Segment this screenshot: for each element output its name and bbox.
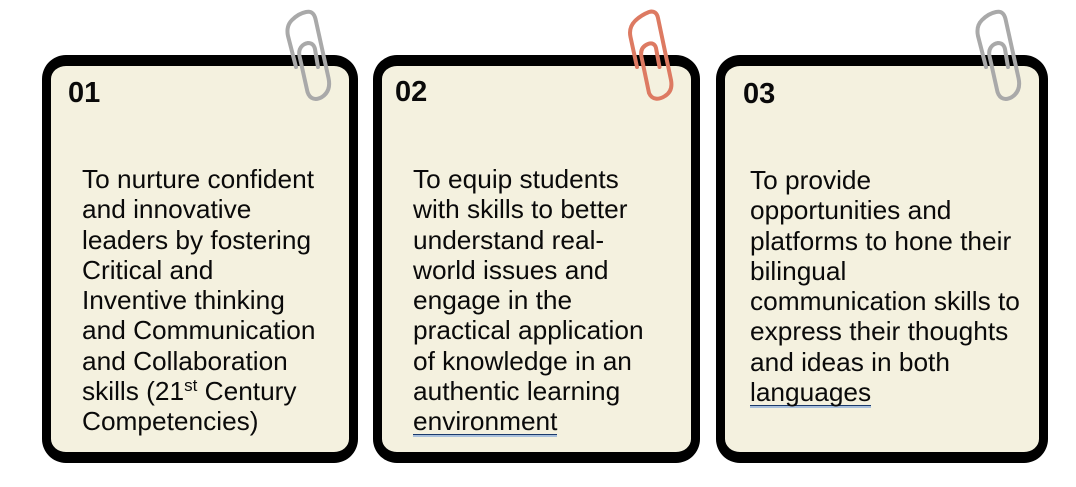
- text block: card 01: and Communication: [82, 315, 315, 345]
- text block: card 01: Competencies): [82, 406, 259, 436]
- text block: card 02: [413, 164, 644, 437]
- text block: card 01: [82, 164, 315, 436]
- text block: card 02: authentic learning: [413, 376, 620, 406]
- panel: card 02: [373, 55, 700, 463]
- text block: card 02: understand real-: [413, 224, 604, 254]
- text block: card 01: and Collaboration: [82, 346, 288, 376]
- text block: card 03: To provide: [750, 165, 871, 195]
- text block: card 01: and innovative: [82, 194, 251, 224]
- heading: 02: 02: [395, 76, 427, 108]
- text block: card 03: express their thoughts: [750, 316, 1008, 346]
- panel: card 01: [42, 55, 358, 463]
- text block: card 02: environment: [413, 406, 557, 436]
- text block: card 03: [750, 165, 1020, 408]
- text block: card 03: opportunities and: [750, 195, 951, 225]
- heading: 01: 01: [68, 77, 100, 109]
- text block: card 02: To equip students: [413, 164, 619, 194]
- text block: card 03: and ideas in both: [750, 346, 950, 376]
- text block: card 03: bilingual: [750, 256, 846, 286]
- text block: card 02: of knowledge in an: [413, 346, 632, 376]
- text block: card 03: communication skills to: [750, 286, 1020, 316]
- text block: card 01: skills (21st Century: [82, 376, 297, 406]
- heading: 03: 03: [743, 78, 775, 110]
- text block: card 03: languages: [750, 377, 871, 407]
- text block: card 02: world issues and: [413, 255, 609, 285]
- text block: card 03: platforms to hone their: [750, 226, 1011, 256]
- text block: card 02: with skills to better: [413, 194, 627, 224]
- text block: card 02: engage in the: [413, 285, 572, 315]
- text block: card 01: Critical and: [82, 255, 213, 285]
- text block: card 01: To nurture confident: [82, 164, 314, 194]
- text block: card 01: leaders by fostering: [82, 224, 311, 254]
- text block: card 02: practical application: [413, 315, 644, 345]
- panel: card 03: [716, 55, 1048, 463]
- text block: card 01: Inventive thinking: [82, 285, 285, 315]
